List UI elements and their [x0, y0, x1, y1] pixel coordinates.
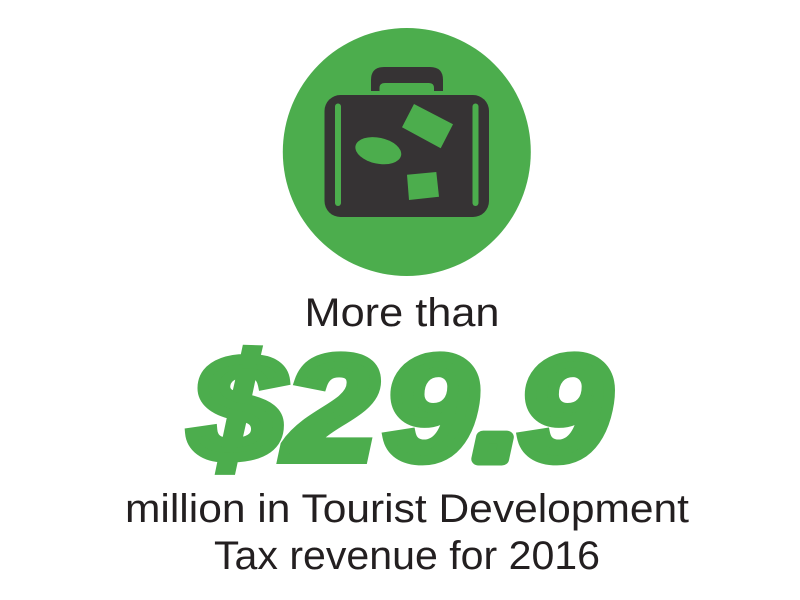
suitcase handle	[371, 67, 443, 91]
big number: 9	[519, 327, 610, 491]
big number: 2	[282, 327, 377, 491]
big number: 9	[384, 327, 476, 491]
suitcase body	[324, 95, 489, 217]
text: More than: More than	[304, 291, 500, 335]
right strap	[472, 104, 478, 206]
sticker: square	[407, 172, 439, 200]
line 2: Tax revenue for 2016	[214, 534, 600, 578]
green circle	[283, 28, 531, 276]
text: description	[125, 487, 689, 578]
big number: .	[475, 327, 521, 491]
icon: suitcase in green circle	[283, 28, 531, 276]
line 1: million in Tourist Development	[125, 487, 689, 531]
big number: $	[190, 327, 285, 491]
sticker: oval	[353, 133, 404, 168]
sticker: rectangle	[402, 104, 453, 148]
left strap	[335, 104, 341, 206]
